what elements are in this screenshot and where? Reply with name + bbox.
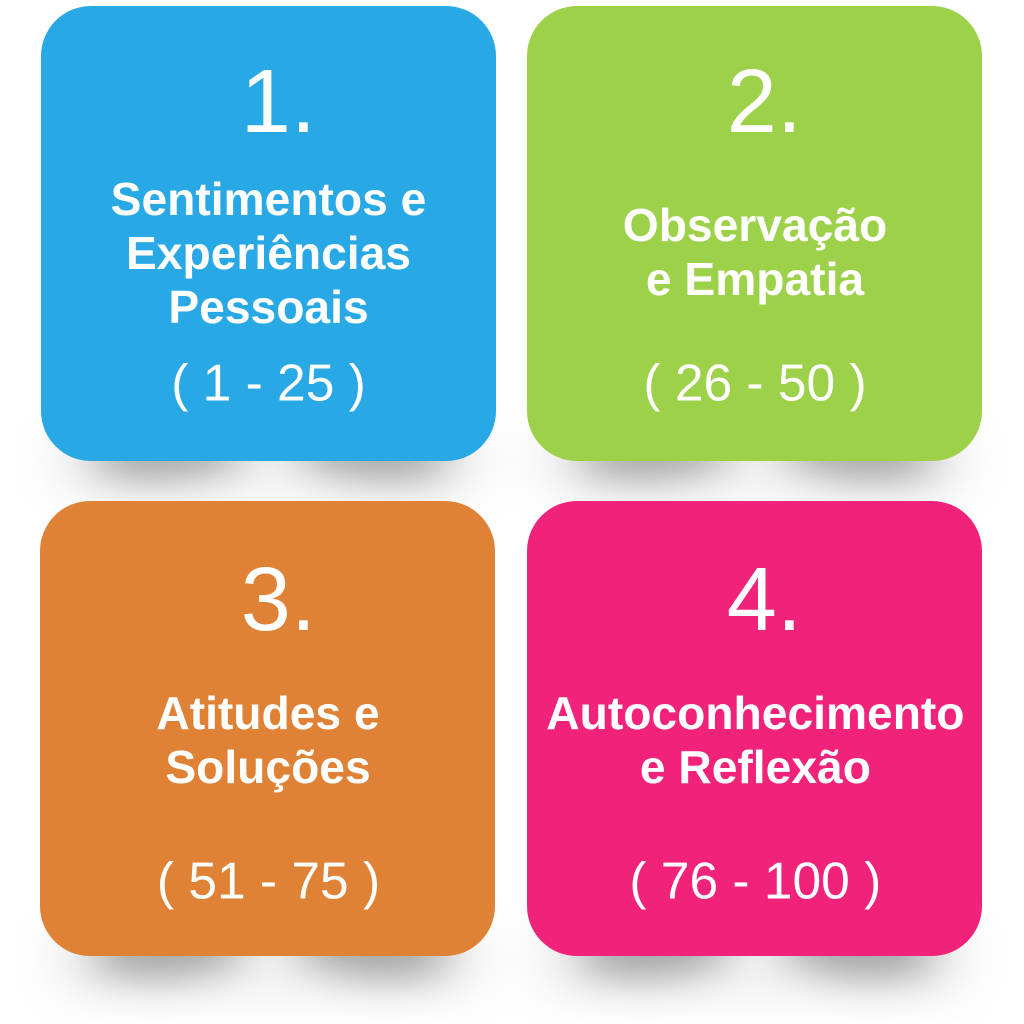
panel 1: Sentimentos e Experiências Pessoais — [41, 6, 496, 461]
panel 3: Atitudes e Soluções — [40, 501, 495, 956]
number 1: 1. — [241, 52, 316, 152]
title 3: Atitudes e — [156, 687, 380, 739]
title 4: e Reflexão — [640, 741, 871, 793]
number 4: 4. — [727, 550, 802, 650]
panel 2: Observação e Empatia — [527, 6, 982, 461]
range 3: ( 51 - 75 ) — [157, 852, 380, 910]
number 3: 3. — [241, 550, 316, 650]
range 2: ( 26 - 50 ) — [643, 354, 867, 412]
range 4: ( 76 - 100 ) — [629, 852, 881, 910]
number 2: 2. — [727, 52, 802, 152]
title 1: Sentimentos e — [111, 173, 426, 225]
panel 4: Autoconhecimento e Reflexão — [527, 501, 982, 956]
title 2: Observação — [623, 199, 887, 251]
range 1: ( 1 - 25 ) — [171, 354, 366, 412]
card shadows — [48, 420, 974, 1000]
title 2: e Empatia — [646, 253, 864, 305]
title 4: Autoconhecimento — [546, 687, 965, 739]
title 3: Soluções — [165, 741, 371, 793]
title 1: Pessoais — [168, 281, 369, 333]
title 1: Experiências — [126, 227, 411, 279]
